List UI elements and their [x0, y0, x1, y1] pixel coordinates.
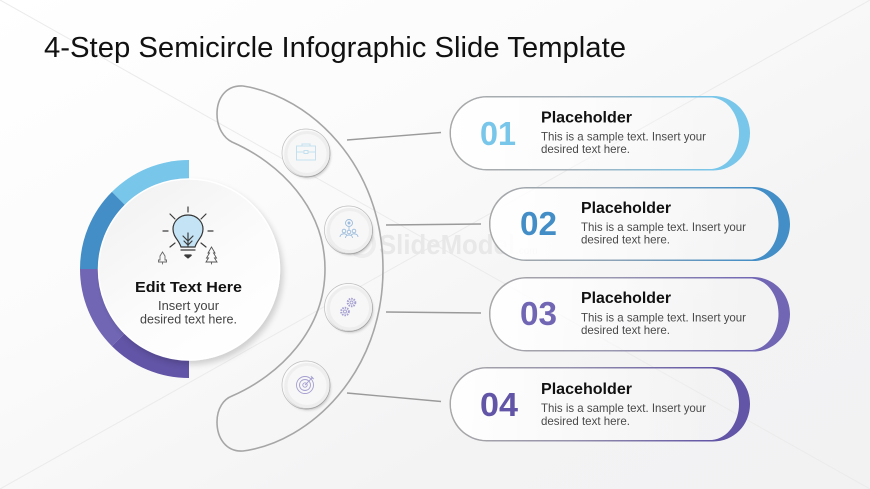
step text — [541, 130, 706, 156]
ring segment: blue — [80, 192, 189, 269]
step heading: Placeholder — [581, 290, 671, 307]
step heading: Placeholder — [541, 110, 632, 126]
step heading: Placeholder — [541, 381, 632, 398]
pill shape — [489, 277, 790, 352]
step text: desired text here. — [541, 142, 630, 156]
step 02 — [489, 187, 790, 261]
title: 4-Step Semicircle Infographic Slide Template — [44, 32, 626, 64]
ring segment: light blue — [112, 160, 189, 269]
center circle — [98, 179, 280, 360]
step text: This is a sample text. Insert your — [541, 130, 706, 144]
center heading: Edit Text Here — [135, 279, 242, 296]
step text — [541, 401, 706, 428]
step text: This is a sample text. Insert your — [541, 401, 706, 415]
step text: This is a sample text. Insert your — [581, 220, 746, 234]
ring segment: purple — [80, 269, 189, 346]
number: 02 — [520, 205, 557, 242]
pill shape — [489, 187, 790, 261]
icon: gears — [341, 299, 355, 315]
pill shape — [450, 367, 750, 442]
button 3 — [324, 284, 372, 332]
button 1 — [282, 129, 330, 177]
step text — [581, 310, 746, 337]
center body text: Insert your — [158, 299, 219, 313]
icon: light bulb with trees — [158, 207, 217, 264]
icon: team — [340, 220, 358, 238]
number: 01 — [480, 115, 516, 152]
step 01 — [450, 96, 750, 170]
pill shape — [450, 96, 750, 170]
step text: desired text here. — [581, 232, 670, 246]
watermark: SlideModel — [379, 229, 515, 260]
semicircle outline — [217, 86, 383, 451]
icon: target — [296, 376, 314, 394]
button 2 — [324, 206, 372, 254]
watermark: .com — [516, 246, 538, 257]
step heading: Placeholder — [581, 200, 671, 217]
step text: This is a sample text. Insert your — [581, 310, 746, 324]
step text — [581, 220, 746, 246]
connector lines — [347, 132, 481, 402]
ring segment: dark purple — [112, 269, 189, 378]
number: 03 — [520, 295, 557, 332]
number: 04 — [480, 386, 519, 423]
step 04 — [450, 367, 750, 442]
center body text: desired text here. — [140, 312, 237, 326]
icon: briefcase — [296, 144, 316, 160]
button 4 — [282, 361, 330, 409]
center body text — [140, 299, 237, 326]
step text: desired text here. — [541, 414, 630, 428]
step text: desired text here. — [581, 323, 670, 337]
step 03 — [489, 277, 790, 352]
donut ring — [80, 160, 189, 378]
